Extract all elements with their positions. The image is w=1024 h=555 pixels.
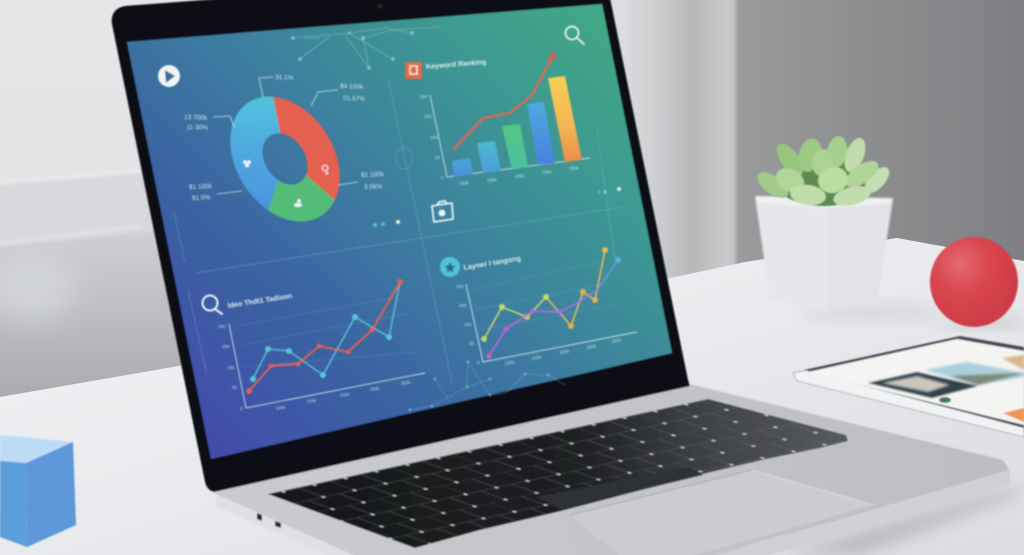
bar chart axis labels: 200: [430, 135, 438, 140]
axis labels: 200k: [339, 392, 351, 398]
red series: [246, 279, 403, 394]
axis labels: [218, 324, 412, 411]
space bar: [536, 467, 703, 509]
tablet green badge: [939, 397, 951, 403]
grid lines: [470, 262, 625, 330]
axis labels: 150k: [531, 354, 543, 361]
donut labels: 31.1%: [275, 74, 294, 82]
magnifier icon: [566, 26, 584, 44]
legend dots right: [598, 187, 621, 194]
yellow series: [481, 247, 608, 342]
axis labels: 300k: [611, 337, 623, 344]
legend dots: [373, 220, 400, 227]
axis labels: 250k: [586, 343, 598, 350]
bar chart axis labels: 200k: [515, 173, 526, 179]
star badge icon: [440, 257, 460, 277]
axis labels: 150: [227, 365, 235, 370]
tablet photo: sky: [925, 362, 1024, 385]
laptop shadow on desk: [780, 488, 1024, 555]
camera icon: [432, 201, 453, 222]
bar chart title: Keyword Ranking: [425, 57, 487, 71]
dashboard content: [158, 26, 637, 411]
white pot: [755, 196, 893, 312]
axes: [229, 324, 425, 408]
tablet screen: [808, 339, 1024, 425]
axis labels: 0: [477, 360, 480, 365]
succulent leaves: [753, 135, 894, 209]
bezel rim: [164, 280, 219, 494]
camera: [378, 4, 382, 8]
red ball: [930, 237, 1024, 328]
screen bezel: [112, 0, 690, 492]
bar chart axis labels: 0: [441, 175, 444, 180]
grid lines: [237, 297, 418, 367]
axis labels: 200: [222, 344, 230, 349]
axes: [466, 284, 637, 362]
donut slice icons: [243, 160, 328, 207]
panel dividers: [174, 78, 623, 383]
trackpad: [570, 470, 873, 555]
play icon: [158, 65, 180, 87]
bar chart axis labels: 50: [435, 155, 441, 160]
tablet orange button: [1003, 408, 1024, 422]
keyboard: [268, 399, 848, 548]
cyan series: [250, 282, 400, 382]
axis labels: 150k: [306, 398, 318, 404]
bar chart axes: [430, 95, 590, 177]
axis labels: 50: [469, 341, 475, 346]
bar chart axis labels: [420, 94, 580, 186]
line chart left title: Ideo Thdt1 Tadison: [227, 291, 293, 310]
axis labels: 200k: [559, 348, 571, 355]
bar chart title icon: [405, 62, 422, 79]
donut labels: (1-30%: [187, 124, 208, 132]
axis labels: 300k: [400, 380, 412, 386]
axis labels: 150: [464, 322, 472, 327]
tablet body: [793, 337, 1024, 437]
axis labels: 0: [240, 406, 243, 411]
donut labels: $1 100k: [361, 171, 385, 179]
bar chart trend line: [453, 51, 557, 150]
bar chart bars: [452, 76, 582, 177]
bar chart axis labels: 150k: [487, 177, 498, 183]
USB ports: [257, 513, 281, 528]
search icon: [202, 296, 222, 314]
donut leader lines: [213, 77, 358, 194]
donut labels: 3 06%: [364, 183, 383, 191]
laptop base top surface: [216, 384, 1009, 555]
pot shadow: [800, 305, 940, 319]
line chart right: [456, 247, 637, 366]
axis labels: 250: [456, 284, 464, 289]
axis labels: [456, 284, 623, 366]
tablet photo: landscape: [868, 372, 978, 398]
donut labels: [184, 74, 385, 202]
donut labels: $1 0%: [192, 194, 211, 202]
axis labels: 100k: [275, 405, 287, 411]
bar chart axis labels: 250k: [542, 169, 553, 175]
potted succulent: [753, 135, 940, 319]
laptop base side edge: [216, 468, 1010, 555]
purple series: [486, 257, 621, 359]
donut labels: $1 100k: [189, 183, 213, 191]
decorative network: [292, 27, 440, 70]
tablet photo: person: [1002, 355, 1024, 370]
blue cube: [0, 435, 76, 547]
axis labels: 50: [232, 385, 238, 390]
donut chart: [222, 89, 348, 229]
donut labels: 13 700k: [184, 114, 208, 122]
bar chart axis labels: 500: [420, 94, 428, 99]
white desk surface: [0, 238, 1024, 555]
screen: [127, 4, 672, 459]
donut labels: $4 100k: [340, 83, 364, 91]
tablet: [793, 336, 1024, 437]
bar chart axis labels: 300: [424, 114, 432, 119]
axis labels: 100k: [504, 359, 516, 366]
line chart right title: Layner I tangong: [463, 253, 521, 272]
axis labels: 250: [218, 324, 226, 329]
background wall: [0, 0, 1024, 420]
donut labels: 01.57%: [343, 95, 365, 103]
axis labels: 200: [459, 303, 467, 308]
bar chart axis labels: 100k: [459, 180, 470, 186]
line chart left: [218, 279, 425, 411]
axis labels: 250k: [369, 386, 381, 392]
bar chart axis labels: 300k: [569, 165, 580, 171]
